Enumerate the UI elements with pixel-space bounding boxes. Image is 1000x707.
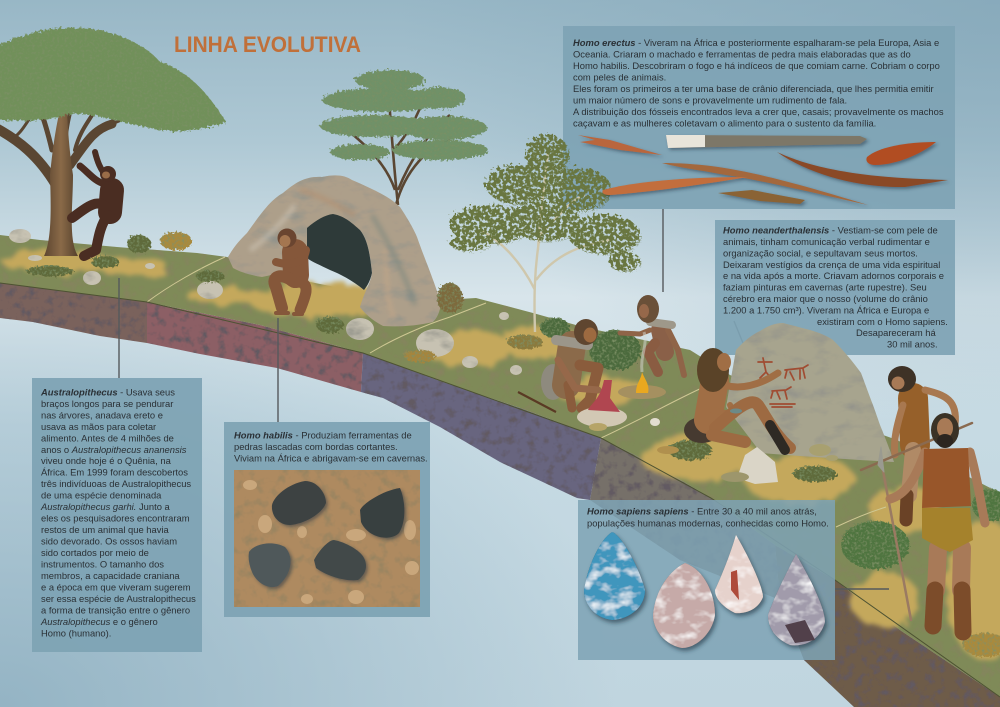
panel: Australopithecus (32, 378, 202, 652)
text: Homo sapiens sapiens: populações humanas modernas, conhecidas como Homo. (587, 518, 829, 528)
icon: standing Homo sapiens back (888, 366, 955, 520)
panel: Homo sapiens sapiens (578, 500, 835, 660)
text: Homo erectus: A distribuição dos fósseis encontrados leva a crer que, casais; provavelmente os machos (573, 106, 944, 117)
stratum: purple-blue (361, 353, 601, 500)
text: Australopithecus: Australopithecus - Usava seus (40, 386, 175, 398)
rock streaks (250, 190, 415, 320)
white rocks near painter (650, 418, 838, 484)
painted boulder (726, 323, 894, 462)
text: Australopithecus: viveu onde hoje é o Quênia, na (41, 455, 172, 466)
tree: acacia with ape (0, 28, 226, 256)
segment divider lines (147, 257, 886, 527)
stratum: dark brown (775, 545, 1000, 707)
text: Homo erectus: com peles de animais. (573, 72, 666, 82)
sand patches (2, 251, 1000, 660)
text: Australopithecus: nas árvores, anadava ereto e (41, 409, 163, 420)
text: Australopithecus: três indivíduoas de Australopithecus (41, 478, 191, 489)
text: Homo neanderthalensis: e na vida após a morte. Criavam adornos corporais e (723, 270, 944, 281)
text: Homo erectus: um maior número de sons e provavelmente um rudimento de fala. (573, 94, 847, 106)
text: Homo sapiens sapiens (587, 506, 829, 528)
panel: Homo erectus (563, 26, 955, 209)
text: Homo neanderthalensis: Desapareceram há (856, 327, 937, 338)
text: Homo neanderthalensis: existiram com o Homo sapiens. (817, 316, 948, 327)
text: Australopithecus: usava as mãos para coletar (41, 421, 156, 432)
text: Australopithecus: anos o Australopithecus ananensis (41, 444, 187, 455)
tool: small (718, 190, 805, 204)
icon: climbing Australopithecus (72, 152, 116, 256)
flint: blue (584, 532, 645, 620)
tool: thin curved (662, 163, 868, 205)
tool: orange long (602, 177, 748, 195)
tool: grey stick (666, 135, 867, 148)
bone tools (578, 135, 948, 205)
stratum: grey (590, 438, 780, 600)
branches and trunk (0, 50, 150, 185)
scattered rocks left (9, 229, 522, 375)
icon: standing Homo sapiens front with spear (861, 413, 985, 632)
text: Australopithecus: sido devorado. Os ossos haviam (41, 536, 177, 546)
panel: Homo neanderthalensis (715, 220, 955, 355)
stone 4 (314, 540, 366, 580)
text: Australopithecus: ser essa espécie de Australopithecus (41, 593, 196, 604)
title: LINHA EVOLUTIVA (174, 32, 361, 57)
text: Homo erectus: caçavam e as mulheres coletavam o alimento para o sustento da família. (573, 118, 876, 128)
tool: long curved (777, 152, 948, 187)
text: Homo habilis: Viviam na África e abrigavam-se em cavernas. (234, 452, 428, 464)
text: Homo neanderthalensis: cérebro era maior que o nosso (volume do crânio (723, 293, 928, 304)
text: Homo habilis: Homo habilis - Produziam ferramentas de (234, 430, 412, 440)
text: Australopithecus: braços longos para se pendurar (41, 398, 173, 409)
icon: kneeling woman (620, 295, 684, 375)
text: Homo erectus: Homo habilis. Descobriram o fogo e há indíceos de que comiam carne. Cobriam o corpo (573, 60, 940, 71)
icon: seated Neanderthal painter (684, 348, 790, 450)
campfire with meat (518, 332, 666, 431)
text: Homo neanderthalensis: faziam pinturas em cavernas (arte rupestre). Seu (723, 282, 927, 293)
stratum: brown (0, 283, 147, 343)
text: Australopithecus: e a época em que viveram sugerem (41, 581, 191, 592)
text: Homo neanderthalensis: 30 mil anos. (887, 339, 938, 350)
text: Homo neanderthalensis: 1.200 a 1.750 cm³). Viveram na África e Europa e (723, 304, 929, 315)
canopy (0, 28, 226, 131)
text: Homo habilis (234, 430, 428, 464)
text: Homo sapiens sapiens: Homo sapiens sapiens - Entre 30 a 40 mil anos atrás, (587, 506, 817, 516)
text: Australopithecus: Australopithecus e o gênero (40, 616, 158, 627)
tool: forked point (578, 135, 662, 155)
tool: orange blade (866, 142, 936, 165)
text: Australopithecus: restos de um animal que havia (41, 524, 169, 535)
text: Australopithecus: alimento. Antes de 4 milhões de (41, 432, 174, 443)
stone 2 (360, 488, 404, 538)
flint: grey-violet (768, 554, 825, 645)
text: Homo erectus: Eles foram os primeiros a ter uma base de crânio diferenciada, que lhes permitia emitir (573, 83, 934, 94)
ground cross-section strata (0, 283, 1000, 707)
shrubs (26, 232, 1000, 657)
flint: pink (653, 563, 715, 648)
text: Australopithecus: Australopithecus garhi. Junto a (40, 501, 171, 512)
text: Homo neanderthalensis: animais, tinham comunicação verbal rudimentar e (723, 236, 930, 247)
text: Australopithecus: Homo (humano). (41, 627, 111, 638)
cave rock (228, 175, 441, 326)
text: Homo neanderthalensis (723, 224, 948, 350)
flint: white and red (715, 535, 763, 613)
text: Australopithecus: instrumentos. O tamanho dos (41, 558, 164, 569)
text: Homo habilis: pedras lascadas com bordas cortantes. (234, 441, 398, 452)
photo: chipped stones (234, 470, 420, 607)
panel: Homo habilis (224, 422, 430, 617)
text: Homo neanderthalensis: Homo neanderthalensis - Vestiam-se com pele de (723, 224, 938, 236)
cave opening (307, 214, 372, 290)
stone 3 (249, 543, 291, 587)
text: Australopithecus: África. Em 1999 foram descobertos (41, 467, 188, 478)
cave paintings (758, 358, 808, 407)
text: Australopithecus: eles os pesquisadores encontraram (41, 513, 190, 524)
text: Homo neanderthalensis: organização social, e sepultavam seus mortos. (723, 247, 918, 258)
icon: Homo habilis crouching (274, 228, 306, 314)
tree: central sapling (450, 135, 641, 332)
stone 1 (272, 481, 326, 525)
ground surface (0, 235, 1000, 697)
text: Australopithecus: membros, a capacidade craniana (41, 570, 180, 581)
text: Australopithecus (40, 386, 196, 638)
connector lines (119, 209, 889, 589)
icon: crouching Homo erectus with fur (541, 319, 598, 408)
text: Australopithecus: de uma espécie denominada (41, 490, 162, 501)
text: Homo erectus: Homo erectus - Viveram na África e posteriormente espalharam-se pela Europa, Asia e (573, 37, 939, 48)
text: Australopithecus: a forma de transição entre o gênero (41, 604, 190, 615)
tree: background acacia (320, 70, 488, 205)
text: Homo erectus: Oceania. Criaram o machado e ferramentas de pedra mais elaboradas que as do (573, 48, 911, 60)
front lip line (0, 283, 1000, 697)
text: Australopithecus: sido cortados por meio de (41, 547, 149, 558)
text: Homo neanderthalensis: Deixaram vestígios da crença de uma vida espiritual (723, 259, 940, 270)
stratum: maroon (147, 302, 363, 392)
text: Homo erectus (573, 37, 944, 128)
